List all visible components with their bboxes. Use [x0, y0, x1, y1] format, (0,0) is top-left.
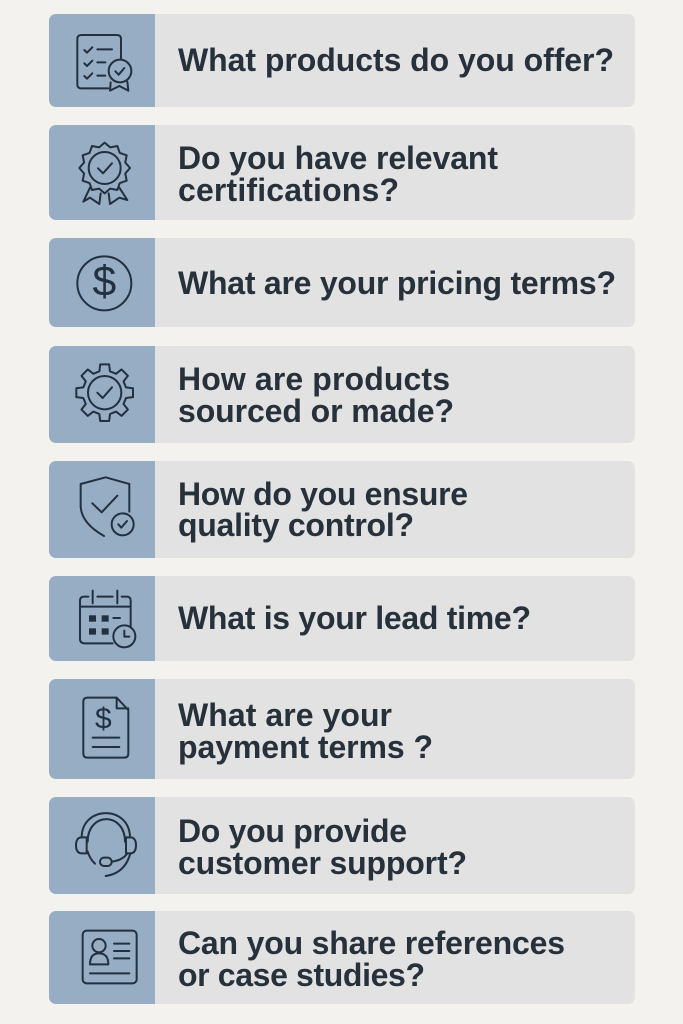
panel: customer support [49, 797, 635, 894]
icon: invoice document [83, 698, 128, 758]
icon: gear with check [76, 364, 133, 421]
icon: award rosette [79, 143, 130, 204]
icon: dollar coin [77, 256, 131, 310]
icon: id card [83, 931, 137, 983]
panel: sourcing: sourced or made? [178, 393, 454, 429]
icon: shield with check [81, 477, 134, 536]
panel: references [49, 911, 635, 1004]
panel: references: or case studies? [178, 957, 425, 993]
panel: certifications: certifications? [178, 172, 399, 208]
heading: quality: How do you ensure [178, 476, 468, 512]
panel: customer support: customer support? [178, 845, 467, 881]
heading: lead time: What is your lead time? [178, 600, 531, 636]
panel: what products do you offer [49, 14, 635, 107]
panel: lead time [49, 576, 635, 661]
icon: dollar coin: $ [92, 258, 116, 306]
heading: payment: What are your [178, 697, 392, 733]
icon: checklist with badge [77, 35, 131, 91]
heading: what products: What products do you offer? [178, 42, 614, 78]
icon: headset [76, 813, 136, 876]
panel: quality control [49, 461, 635, 558]
panel: payment terms [49, 679, 635, 779]
heading: pricing: What are your pricing terms? [178, 265, 616, 301]
icon: invoice document: $ [95, 702, 112, 735]
panel: quality control: quality control? [178, 507, 414, 543]
panel: sourcing [49, 346, 635, 443]
panel: pricing terms [49, 238, 635, 327]
panel: certifications [49, 125, 635, 220]
icon: calendar with clock [80, 591, 135, 647]
panel: payment terms: payment terms ? [178, 729, 433, 765]
heading: support: Do you provide [178, 813, 407, 849]
heading: references: Can you share references [178, 925, 565, 961]
heading: certifications: Do you have relevant [178, 140, 498, 176]
heading: sourcing: How are products [178, 361, 450, 397]
